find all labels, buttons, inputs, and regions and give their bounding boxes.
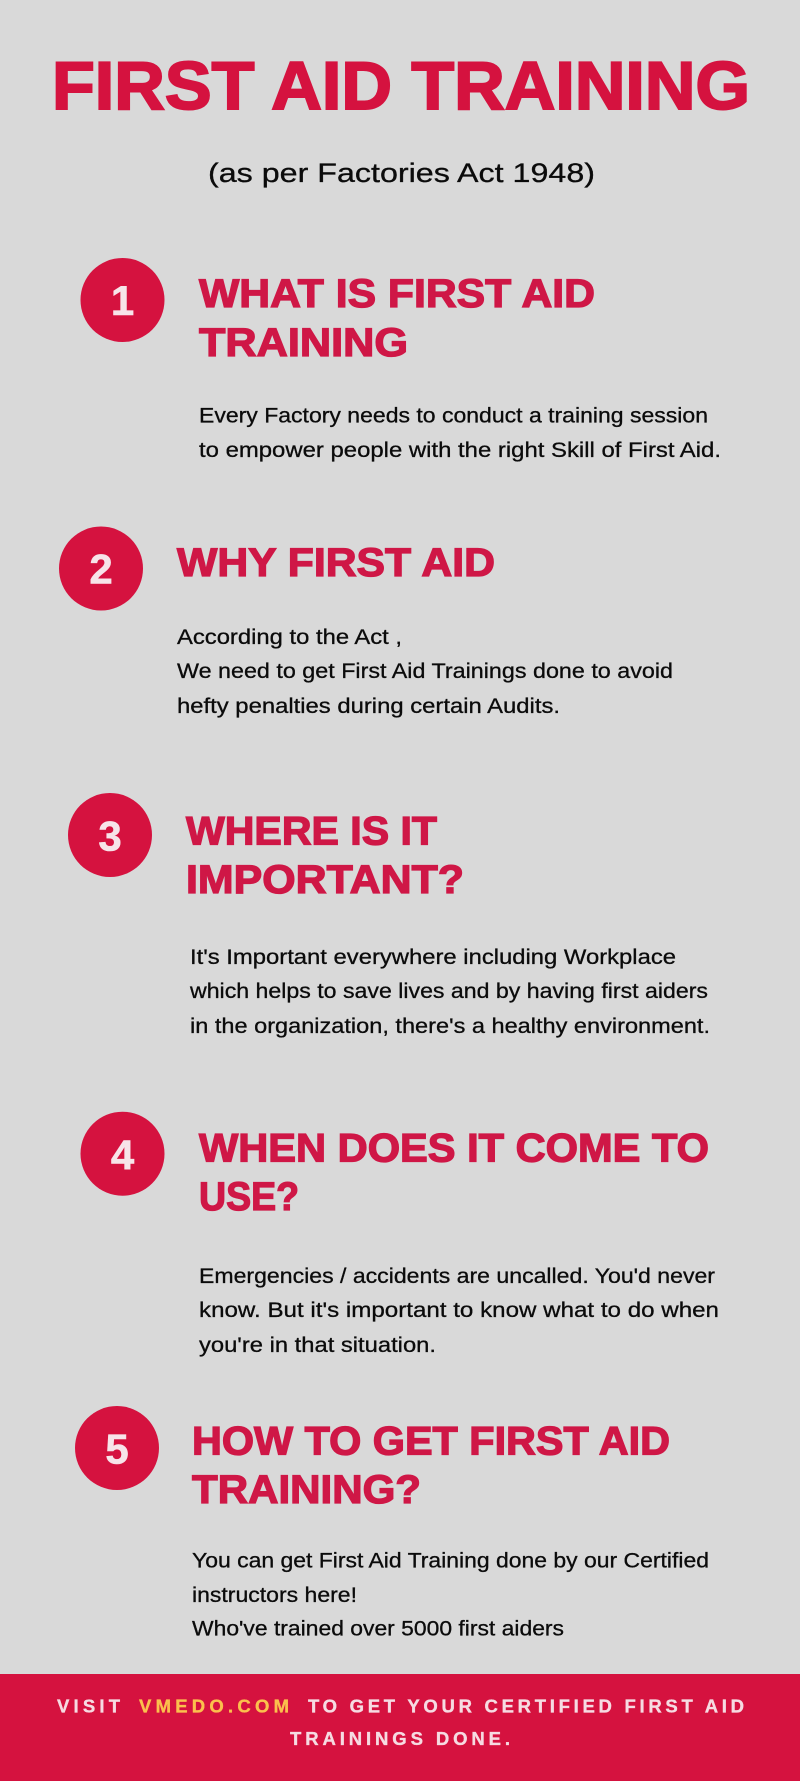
number badge 5: 5 bbox=[105, 1426, 129, 1472]
body text 5: instructors here! bbox=[192, 1583, 357, 1607]
panel: section 1 bbox=[80, 258, 721, 462]
call to action text: VMEDO.COM bbox=[139, 1696, 289, 1717]
heading 1: WHAT IS FIRST AID bbox=[199, 272, 595, 316]
heading 5: TRAINING? bbox=[192, 1468, 421, 1512]
body text 1: Every Factory needs to conduct a training session bbox=[199, 404, 708, 428]
title: FIRST AID TRAINING bbox=[52, 48, 750, 124]
body text 2 bbox=[177, 625, 673, 718]
call to action text: TRAININGS DONE. bbox=[290, 1728, 510, 1749]
body text 3 bbox=[189, 945, 710, 1038]
footer banner bbox=[0, 1674, 800, 1781]
body text 3: which helps to save lives and by having first aiders bbox=[189, 979, 708, 1003]
heading 5: HOW TO GET FIRST AID bbox=[192, 1420, 670, 1464]
number badge 4 bbox=[80, 1112, 164, 1196]
body text 4 bbox=[199, 1264, 719, 1357]
panel: section 4 bbox=[80, 1112, 719, 1357]
number badge 4: 4 bbox=[111, 1132, 135, 1178]
heading 3: IMPORTANT? bbox=[186, 858, 464, 902]
body text 4: you're in that situation. bbox=[199, 1333, 436, 1357]
body text 5: Who've trained over 5000 first aiders bbox=[192, 1617, 564, 1641]
body text 3: It's Important everywhere including Workplace bbox=[190, 945, 676, 969]
panel: section 2 bbox=[59, 526, 673, 718]
body text 2: According to the Act , bbox=[177, 625, 402, 649]
subtitle: (as per Factories Act 1948) bbox=[208, 158, 595, 188]
heading 4: WHEN DOES IT COME TO bbox=[199, 1127, 709, 1171]
number badge 5 bbox=[75, 1406, 159, 1490]
body text 5: You can get First Aid Training done by our Certified bbox=[192, 1549, 709, 1573]
number badge 2 bbox=[59, 526, 143, 610]
body text 4: Emergencies / accidents are uncalled. You'd never bbox=[199, 1264, 715, 1288]
heading 5 bbox=[192, 1420, 670, 1512]
number badge 3 bbox=[68, 793, 152, 877]
number badge 3: 3 bbox=[98, 812, 122, 860]
number badge 1 bbox=[80, 258, 164, 342]
number badge 2: 2 bbox=[89, 546, 113, 592]
body text 1: to empower people with the right Skill of First Aid. bbox=[199, 438, 721, 462]
body text 3: in the organization, there's a healthy environment. bbox=[190, 1014, 710, 1038]
heading 4 bbox=[199, 1127, 709, 1219]
body text 1 bbox=[199, 404, 721, 462]
number badge 1: 1 bbox=[111, 277, 134, 324]
heading 2: WHY FIRST AID bbox=[177, 541, 495, 585]
body text 4: know. But it's important to know what to do when bbox=[199, 1298, 719, 1322]
panel: section 5 bbox=[75, 1406, 709, 1641]
call to action text bbox=[57, 1696, 744, 1749]
call to action text: TO GET YOUR CERTIFIED FIRST AID bbox=[308, 1696, 744, 1717]
body text 5 bbox=[192, 1549, 709, 1641]
heading 1 bbox=[199, 272, 595, 365]
body text 2: We need to get First Aid Trainings done to avoid bbox=[177, 659, 673, 683]
heading 3: WHERE IS IT bbox=[186, 809, 437, 853]
heading 1: TRAINING bbox=[199, 321, 408, 365]
heading 4: USE? bbox=[199, 1175, 299, 1219]
body text 2: hefty penalties during certain Audits. bbox=[177, 694, 560, 718]
panel: section 3 bbox=[68, 793, 710, 1038]
call to action text: VISIT bbox=[57, 1696, 121, 1717]
heading 3 bbox=[186, 809, 464, 902]
